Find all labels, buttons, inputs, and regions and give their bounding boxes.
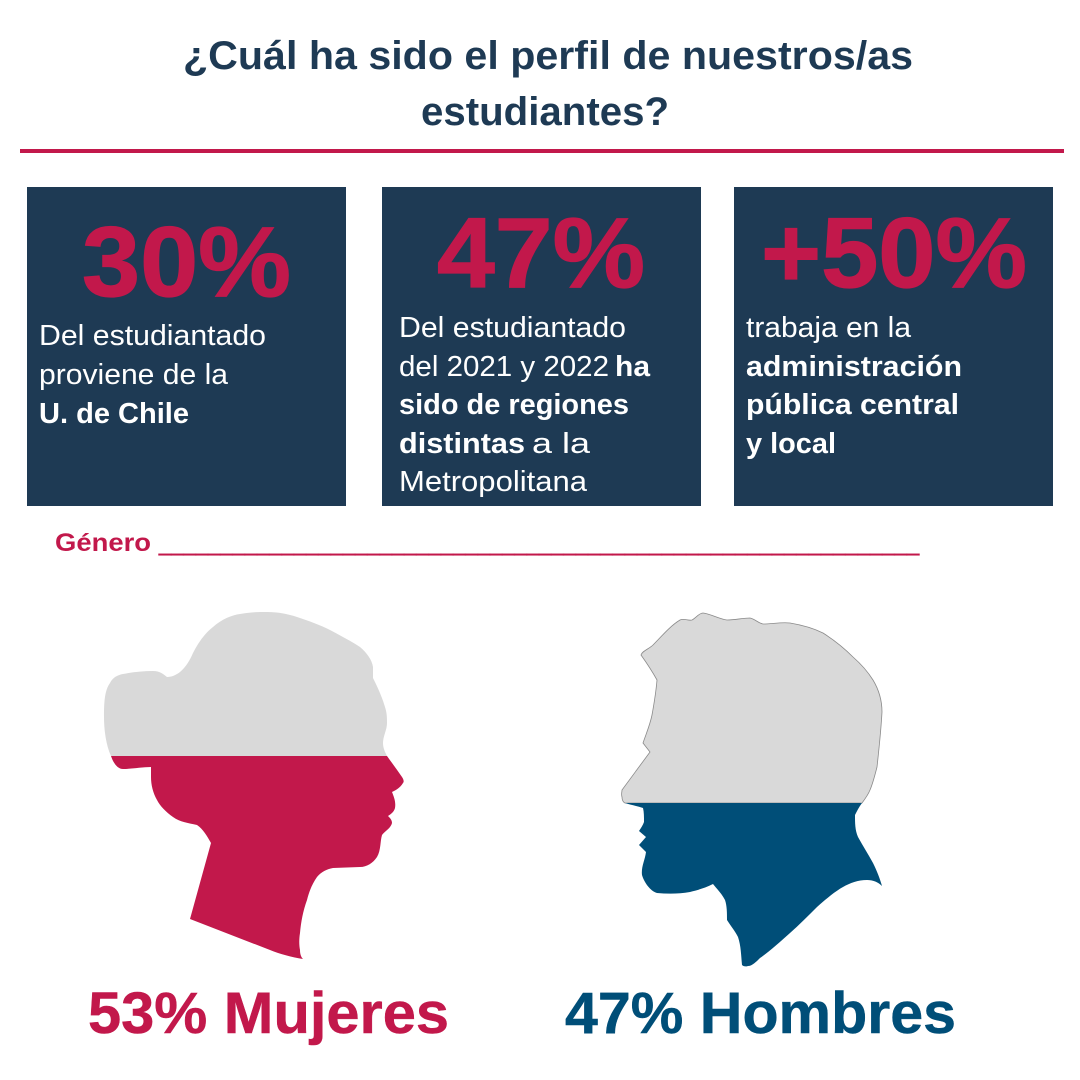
panel: 47% regiones: ha [615,351,651,383]
panel: 30% U. de Chile [27,187,346,506]
panel: +50% administración pública: y local [746,428,836,460]
panel: +50% administración pública: +50% [761,197,1027,308]
heading: Género: Género [55,529,151,557]
icon: man head silhouette [622,613,882,966]
panel: 47% regiones: del 2021 y 2022 [399,351,609,383]
panel: 47% regiones: Del estudiantado [399,312,626,344]
title: estudiantes? [421,90,669,134]
title: ¿Cuál ha sido el perfil de nuestros/as [183,34,913,78]
title [183,34,913,134]
panel: 47% regiones: distintas [399,428,525,460]
panel: 47% regiones: a la [532,428,591,460]
panel: +50% administración pública: trabaja en la [746,312,912,344]
panel: +50% administración pública [734,187,1053,506]
label: 47% Hombres: 47% Hombres [565,981,956,1046]
icon: woman head silhouette [104,612,404,959]
panel: 30% U. de Chile: U. de Chile [39,398,189,430]
panel: +50% administración pública: pública central [746,389,959,421]
panel: 47% regiones: Metropolitana [399,466,588,498]
panel: 30% U. de Chile: 30% [82,206,291,317]
panel: +50% administración pública: administración [746,351,962,383]
panel: 47% regiones: sido de regiones [399,389,629,421]
panel: 30% U. de Chile: Del estudiantado [39,320,266,352]
panel: 47% regiones [382,187,701,506]
heading: Género: ______________________________________________________________ [158,531,920,558]
label: 53% Mujeres: 53% Mujeres [88,981,449,1046]
panel: 47% regiones: 47% [437,197,645,308]
panel: 30% U. de Chile: proviene de la [39,359,229,391]
